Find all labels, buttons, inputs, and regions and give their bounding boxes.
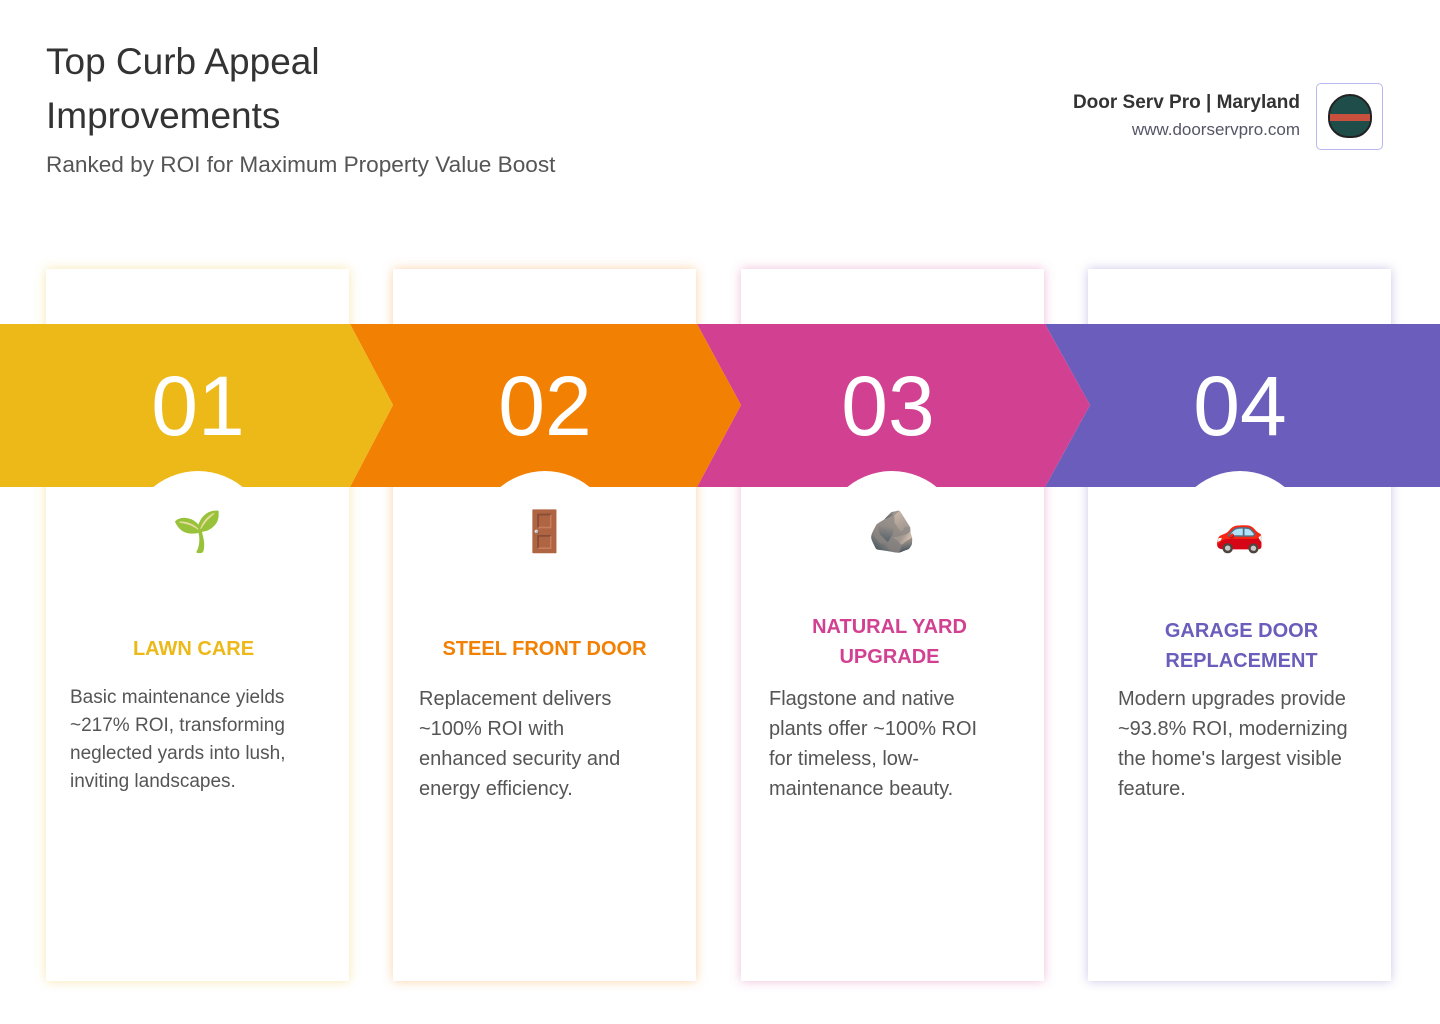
arrow band: 04 [1193,359,1287,453]
heading 2: STEEL FRONT DOOR [442,638,647,660]
title: Improvements [46,95,280,136]
logo [1316,83,1383,150]
card 3 [741,269,1044,981]
text 2: Replacement delivers ~100% ROI with enhanced security and energy efficiency. [419,688,620,800]
heading 1: LAWN CARE [133,638,254,660]
subtitle: Ranked by ROI for Maximum Property Value Boost [46,152,555,177]
title: Top Curb Appeal [46,41,320,82]
text 4: Modern upgrades provide ~93.8% ROI, modernizing the home's largest visible feature. [1118,688,1348,800]
icon: car: 🚗 [1215,508,1264,555]
heading 4 [1165,620,1318,672]
icon: sprout: 🌱 [173,508,222,555]
heading 3 [812,616,967,668]
title [46,41,320,136]
brand url: www.doorservpro.com [1132,120,1300,139]
text 1: Basic maintenance yields ~217% ROI, transforming neglected yards into lush, inviting landscapes. [70,687,285,792]
heading 3: NATURAL YARD [812,616,967,638]
icon: door: 🚪 [520,508,569,555]
heading 4: REPLACEMENT [1165,650,1318,672]
arrow band: 03 [841,359,935,453]
card 2 [393,269,696,981]
brand name: Door Serv Pro | Maryland [1073,92,1300,113]
text 3: Flagstone and native plants offer ~100% ROI for timeless, low-maintenance beauty. [769,688,977,800]
heading 4: GARAGE DOOR [1165,620,1318,642]
heading 3: UPGRADE [839,646,940,668]
icon: rock: 🪨 [868,508,917,555]
arrow band: 02 [498,359,592,453]
card 1 [46,269,349,981]
arrow band: 01 [151,359,245,453]
brand block [1073,83,1383,150]
card 4 [1088,269,1391,981]
